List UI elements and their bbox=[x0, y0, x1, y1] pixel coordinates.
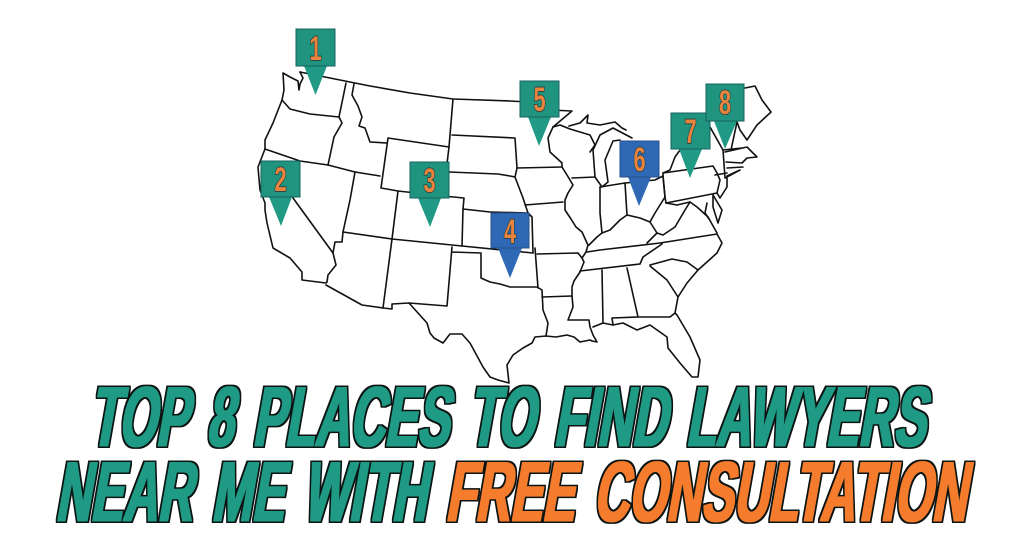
US states outline map bbox=[258, 72, 771, 383]
map pin 7 bbox=[671, 113, 710, 178]
title bbox=[52, 370, 979, 540]
map pin 1: 1 bbox=[309, 30, 322, 68]
map pin 2: 2 bbox=[274, 161, 287, 199]
map pin 5: 5 bbox=[533, 81, 546, 119]
map pin 2 bbox=[261, 161, 300, 226]
map pin 3 bbox=[410, 162, 449, 227]
map pin 8 bbox=[706, 84, 744, 149]
map pin 6 bbox=[620, 141, 659, 206]
map pin 8: 8 bbox=[719, 84, 731, 122]
map pin 7: 7 bbox=[684, 113, 697, 151]
map pin 1 bbox=[296, 29, 335, 95]
map pin 3: 3 bbox=[423, 162, 436, 200]
map pin 4 bbox=[491, 213, 529, 278]
map pin 6: 6 bbox=[633, 141, 646, 179]
map pin 4: 4 bbox=[504, 213, 516, 251]
map pin 5 bbox=[520, 81, 559, 146]
